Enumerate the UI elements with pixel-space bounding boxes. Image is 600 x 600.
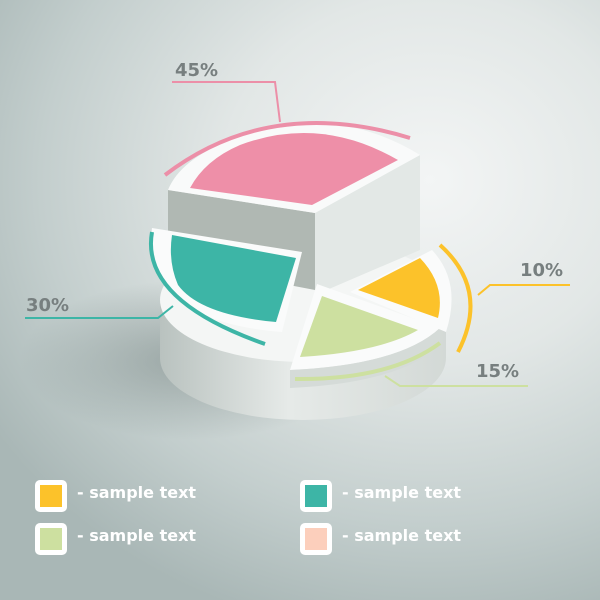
legend item peach [300, 523, 461, 555]
pie chart [151, 123, 452, 420]
teal slice [151, 228, 302, 332]
legend item teal: - sample text [342, 483, 461, 502]
legend item green: - sample text [77, 526, 196, 545]
base cylinder [160, 238, 446, 420]
pink block [168, 123, 420, 295]
callout: 45% [165, 60, 410, 175]
callout: 45%: 45% [175, 60, 218, 81]
callout: 10% [440, 245, 570, 352]
legend item green [35, 523, 196, 555]
yellow slice [350, 250, 452, 332]
legend item teal [300, 480, 461, 512]
callout: 30% [25, 232, 265, 344]
legend item yellow: - sample text [77, 483, 196, 502]
legend item peach: - sample text [342, 526, 461, 545]
callout: 15%: 15% [476, 361, 519, 382]
shadow [20, 280, 360, 440]
green slice [290, 284, 440, 388]
callout: 15% [295, 343, 528, 386]
callout: 10%: 10% [520, 260, 563, 281]
callout: 30%: 30% [26, 295, 69, 316]
legend [35, 480, 461, 555]
legend item yellow [35, 480, 196, 512]
